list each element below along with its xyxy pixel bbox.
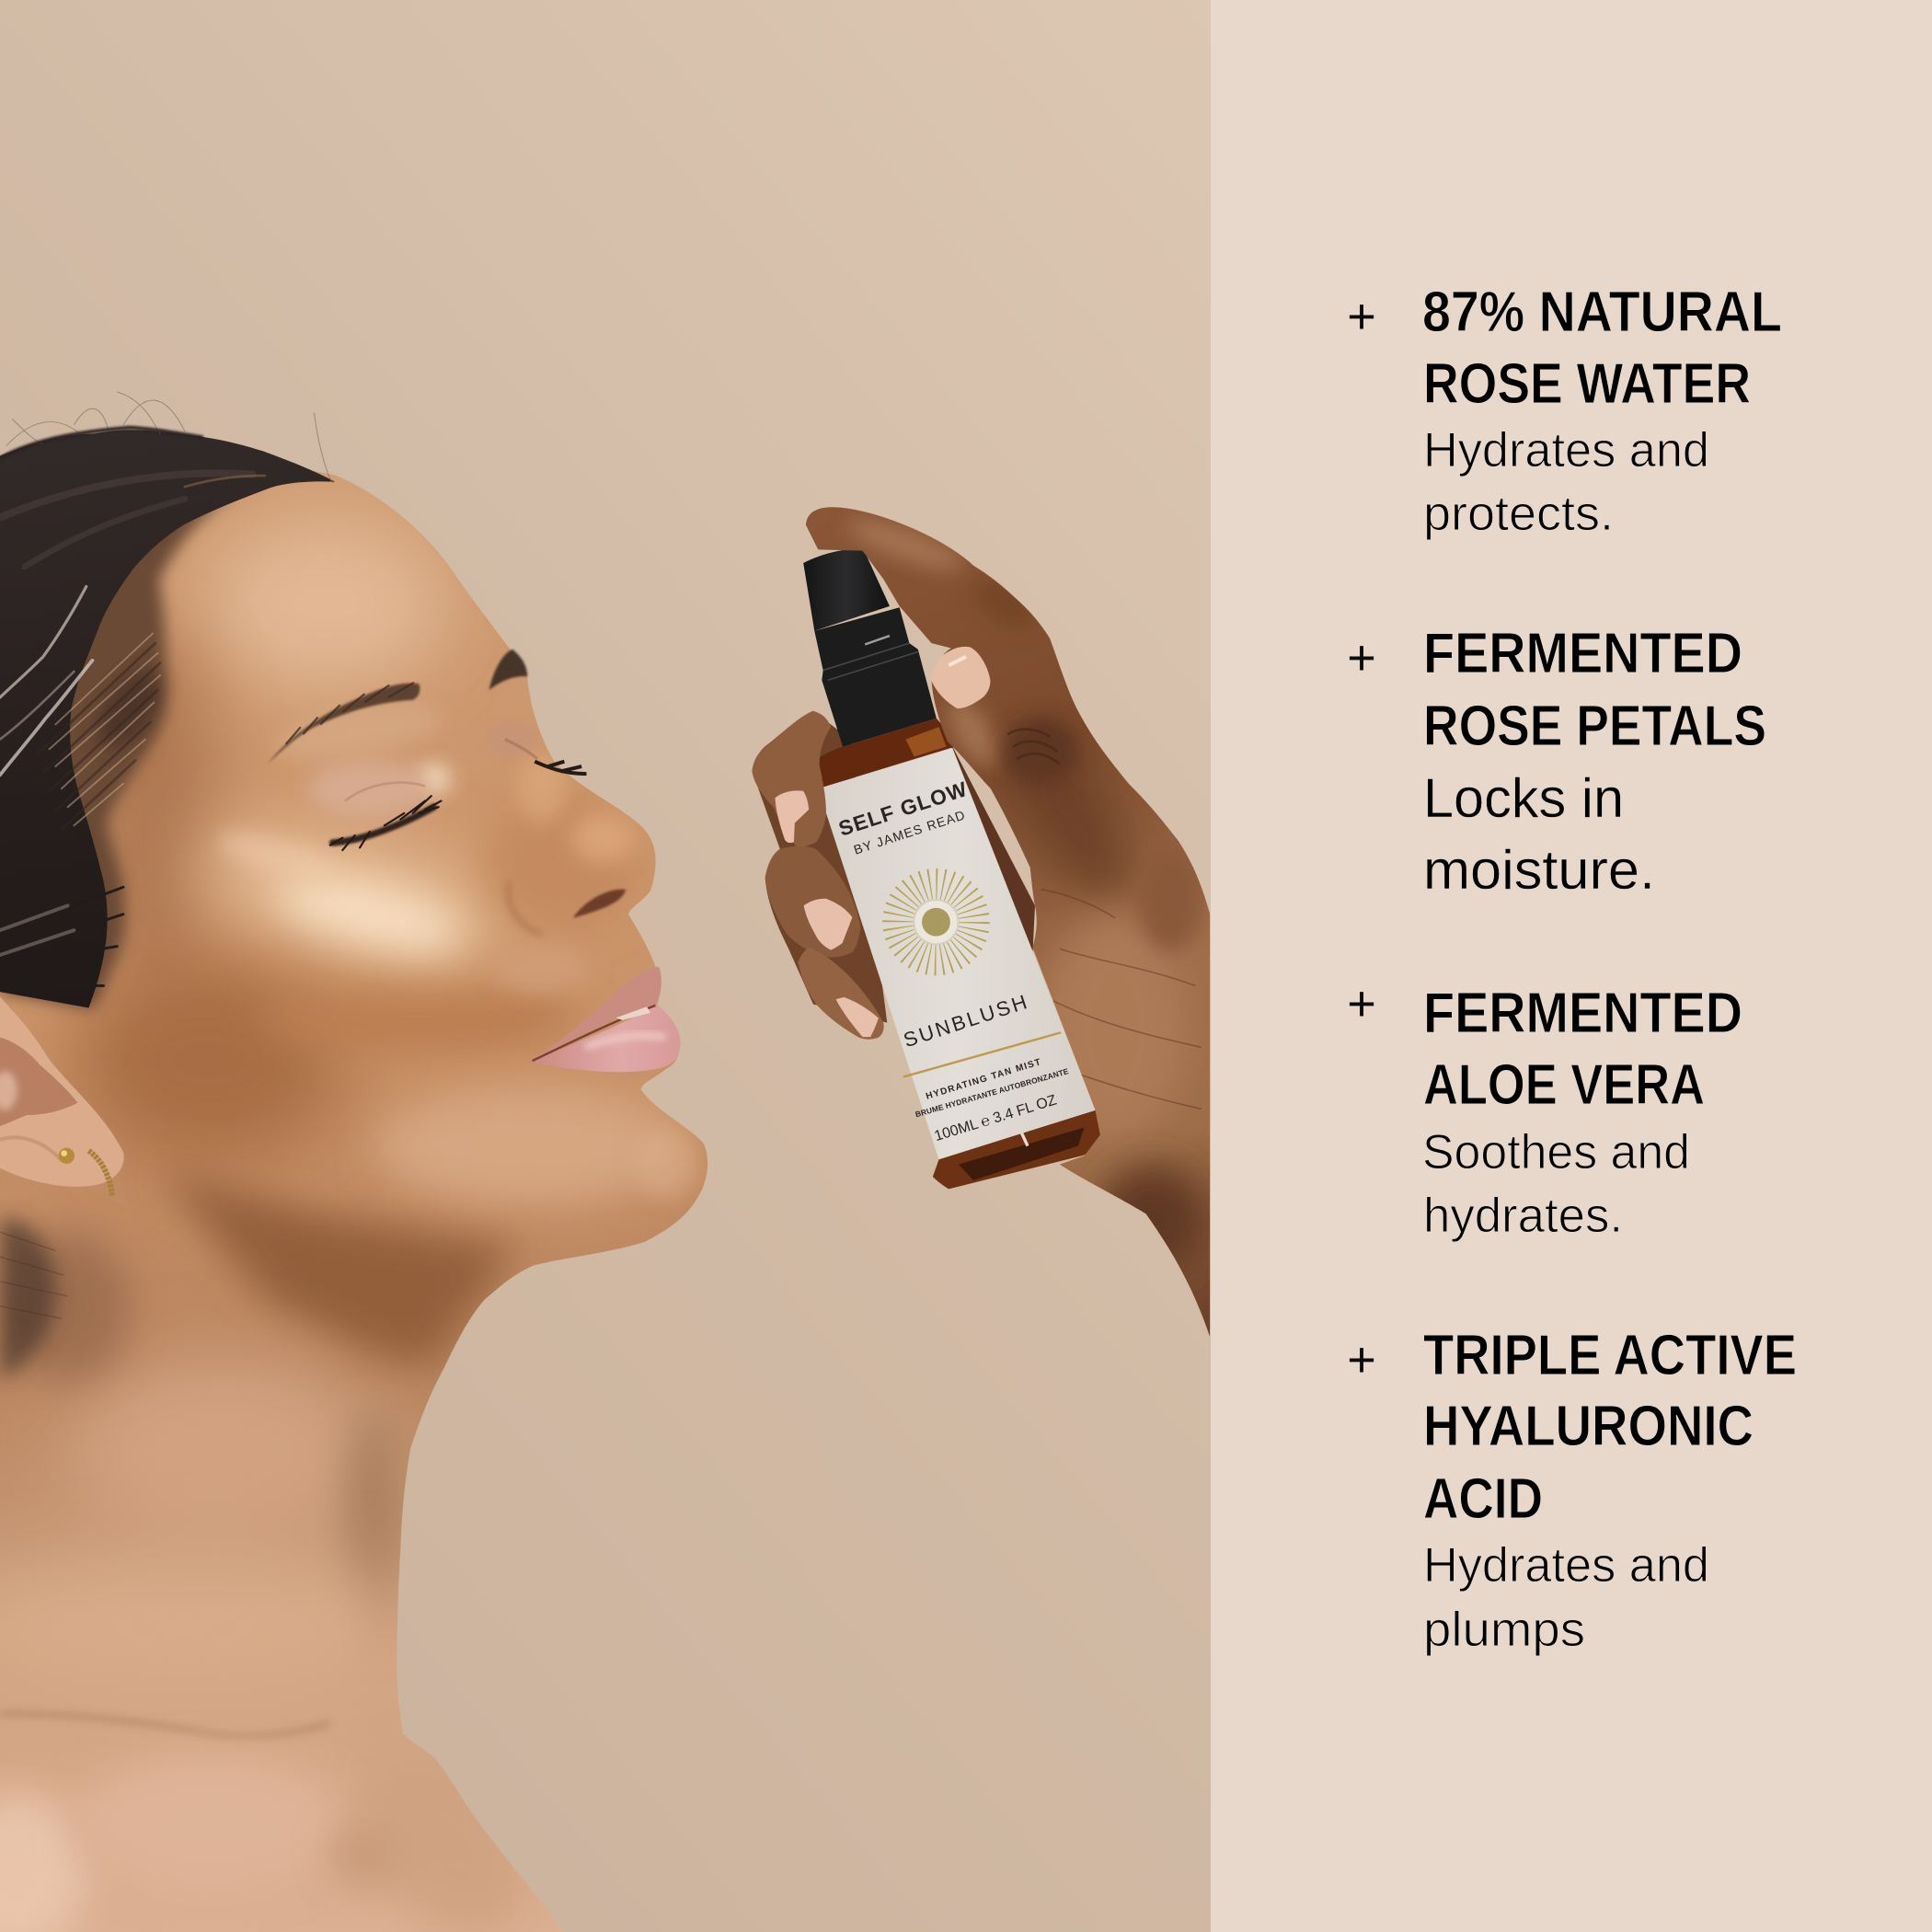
label text: bottle branding: HYDRATING TAN MIST	[925, 1057, 1042, 1102]
ingredient 1: rose water: ROSE WATER	[1423, 352, 1751, 416]
ingredient 1: rose water: protects.	[1423, 487, 1614, 541]
ingredient 1: rose water: Hydrates and	[1423, 423, 1709, 477]
ingredient 3: aloe vera: hydrates.	[1423, 1189, 1623, 1243]
ingredient 4: hyaluronic acid: ACID	[1423, 1467, 1543, 1531]
hair: flyaways	[6, 392, 333, 483]
label text: bottle branding: SELF GLOW	[835, 776, 970, 841]
woman: skin silhouette and shading	[0, 443, 707, 1932]
ingredient 4: hyaluronic acid: plumps	[1423, 1603, 1585, 1657]
ingredient 1: rose water: 87% NATURAL	[1422, 281, 1782, 344]
plus marker: +	[1347, 630, 1376, 685]
woman: ear and earrings	[0, 996, 124, 1196]
hand: fingers wrapping bottle	[753, 711, 884, 1040]
label text: bottle branding: BRUME HYDRATANTE AUTOBRONZANTE	[914, 1066, 1070, 1119]
plus marker: +	[1347, 976, 1376, 1031]
ingredient 4: hyaluronic acid: HYALURONIC	[1423, 1395, 1754, 1458]
ingredient 3: aloe vera: Soothes and	[1422, 1125, 1690, 1179]
label text: bottle branding: SUNBLUSH	[901, 990, 1029, 1052]
ingredient 1: rose water	[1347, 281, 1782, 541]
ingredient 2: rose petals: moisture.	[1423, 839, 1655, 901]
ingredient 4: hyaluronic acid	[1347, 1324, 1797, 1657]
ingredient 4: hyaluronic acid: Hydrates and	[1423, 1538, 1709, 1593]
hair: solid dark mass	[0, 430, 335, 1008]
ingredient 2: rose petals	[1347, 622, 1766, 901]
hand: thumbnail	[931, 647, 990, 708]
label text: bottle branding: BY JAMES READ	[852, 808, 967, 857]
bottle: nozzle and cap	[803, 548, 890, 631]
woman: nose and lips	[530, 890, 680, 1072]
hair: light strands	[50, 633, 160, 825]
product: spray bottle	[803, 548, 1100, 1189]
hair: striated temple zone	[0, 502, 234, 1016]
panel: ingredient column background	[1211, 0, 1932, 1932]
hand: palm, thumb and index finger	[806, 507, 1210, 1337]
fingernails	[775, 790, 809, 843]
ingredient 3: aloe vera: ALOE VERA	[1423, 1053, 1705, 1117]
plus marker: +	[1347, 1332, 1376, 1387]
bottle: label	[818, 748, 1096, 1159]
bottle: amber glass	[819, 718, 953, 787]
illustration: woman and hand with bottle	[0, 392, 1210, 1932]
label text: bottle branding	[835, 776, 1070, 1144]
ingredient 4: hyaluronic acid: TRIPLE ACTIVE	[1423, 1324, 1797, 1387]
woman: hair	[0, 392, 335, 1380]
ingredient 3: aloe vera	[1347, 976, 1742, 1243]
ingredient 2: rose petals: FERMENTED	[1423, 622, 1742, 685]
label text: bottle branding: 100ML ℮ 3.4 FL OZ	[932, 1091, 1059, 1144]
plus marker: +	[1347, 289, 1376, 344]
ingredient 3: aloe vera: FERMENTED	[1423, 982, 1742, 1045]
ingredient 2: rose petals: ROSE PETALS	[1423, 695, 1766, 758]
label: gold line	[903, 1032, 1061, 1077]
ingredient 2: rose petals: Locks in	[1423, 767, 1624, 829]
photo backdrop	[0, 0, 1211, 1932]
label: sun emblem	[898, 884, 974, 960]
hand: shadow behind bottle	[753, 711, 1035, 1023]
woman: eyes and brows	[268, 650, 587, 850]
